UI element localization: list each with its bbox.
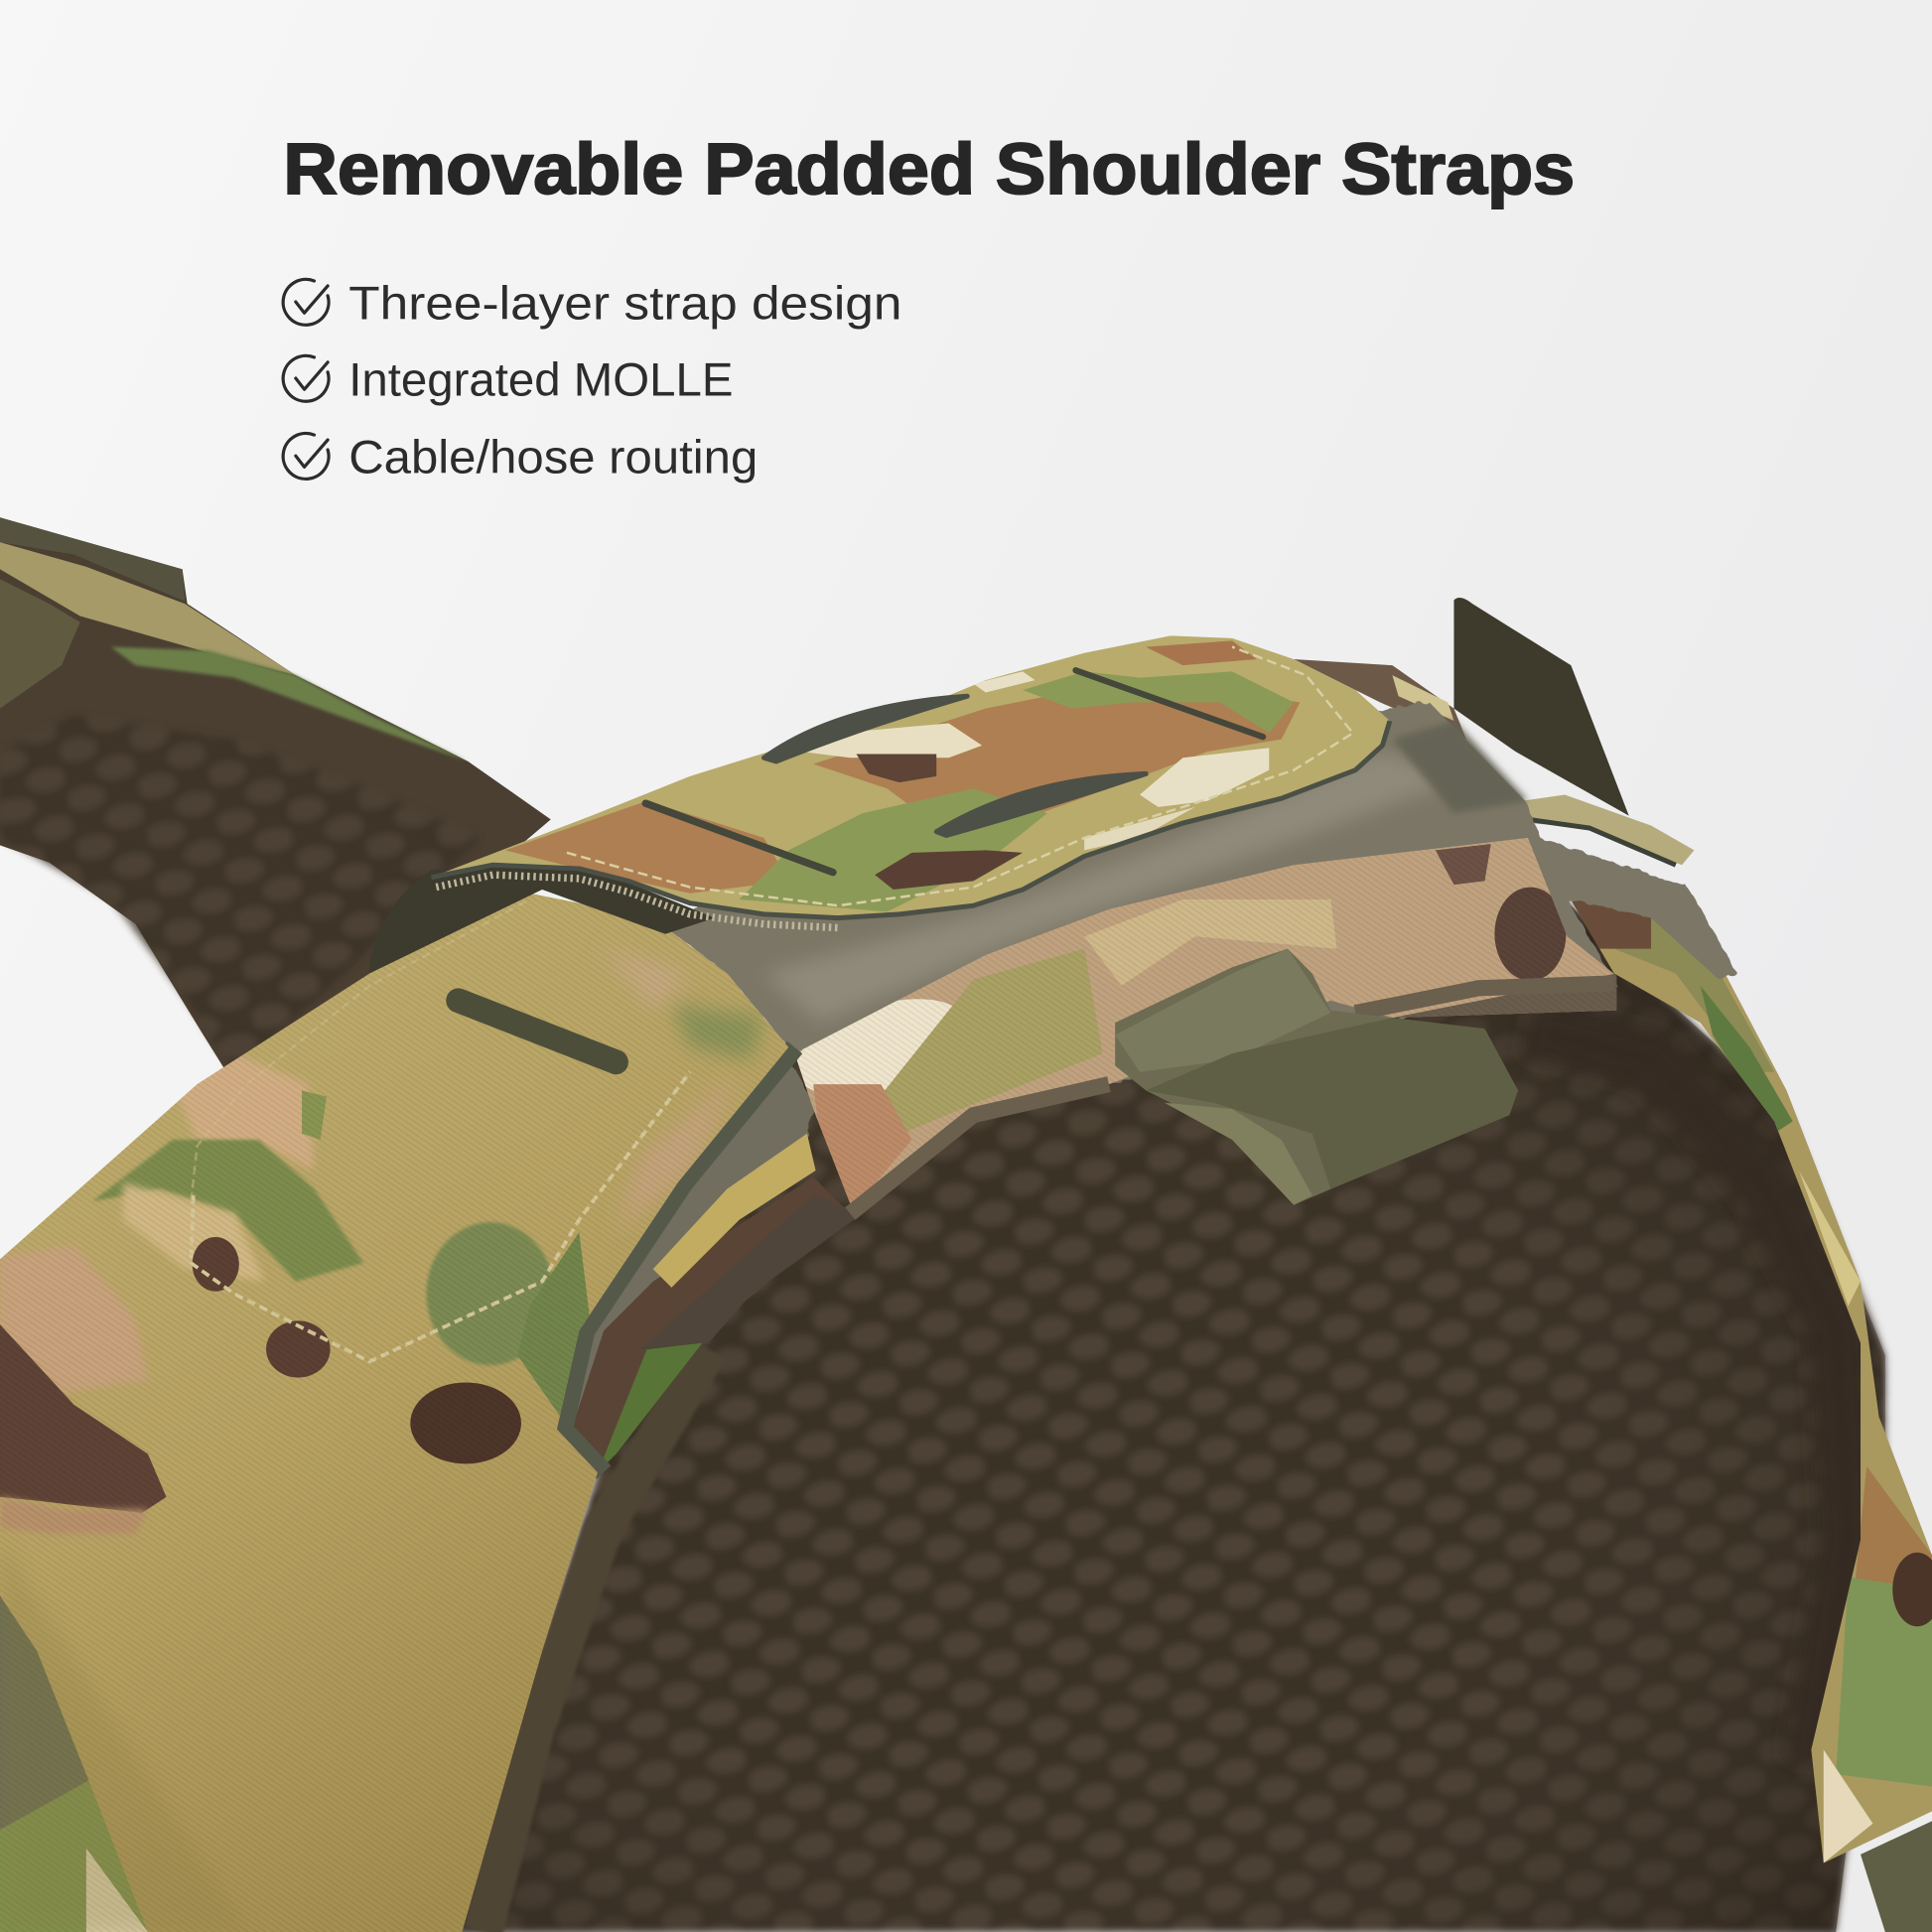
- flap fringe: [436, 875, 838, 928]
- top camo flap with slots: [419, 628, 1405, 928]
- main strap shadow edge: [563, 1047, 794, 1472]
- flap slots: [763, 696, 967, 761]
- main camo front strap: [0, 863, 813, 1932]
- lower strap layers under main strap: [557, 1059, 863, 1472]
- stitching: [191, 899, 530, 1201]
- flap underside lip: [369, 863, 715, 973]
- band binding edge: [850, 983, 1614, 1213]
- feature: three-layer strap design: Three-layer strap design: [348, 276, 901, 329]
- padded mesh interior: [456, 863, 1885, 1932]
- fabric pull tab: [1453, 598, 1629, 816]
- feature: cable/hose routing: Cable/hose routing: [348, 431, 758, 483]
- webbing loop: [1115, 949, 1518, 1205]
- strap slot: [459, 1001, 617, 1062]
- icon: check circle: [283, 355, 329, 401]
- right camo edge strap: [1553, 875, 1932, 1872]
- title: Removable Padded Shoulder Straps: [283, 130, 1575, 209]
- flap stitching: [567, 647, 1353, 905]
- icon: check circle: [283, 434, 329, 479]
- hook and loop velcro band: [653, 702, 1737, 1084]
- camo patches: [0, 949, 763, 1932]
- flap edge binding: [431, 721, 1390, 918]
- lower flap end: [1522, 794, 1694, 865]
- lower right olive webbing: [1861, 1821, 1932, 1932]
- mesh binding edge: [483, 1349, 709, 1932]
- back strap and fabric pull tab: [1294, 598, 1694, 865]
- feature: integrated MOLLE: Integrated MOLLE: [348, 352, 733, 405]
- left side webbing: [0, 1595, 88, 1830]
- feature list: [283, 276, 901, 483]
- flap camo patches: [505, 801, 788, 894]
- far shoulder strap: [0, 517, 551, 1084]
- mid camo layer with slot: [783, 826, 1626, 1220]
- icon: check circle: [283, 279, 329, 325]
